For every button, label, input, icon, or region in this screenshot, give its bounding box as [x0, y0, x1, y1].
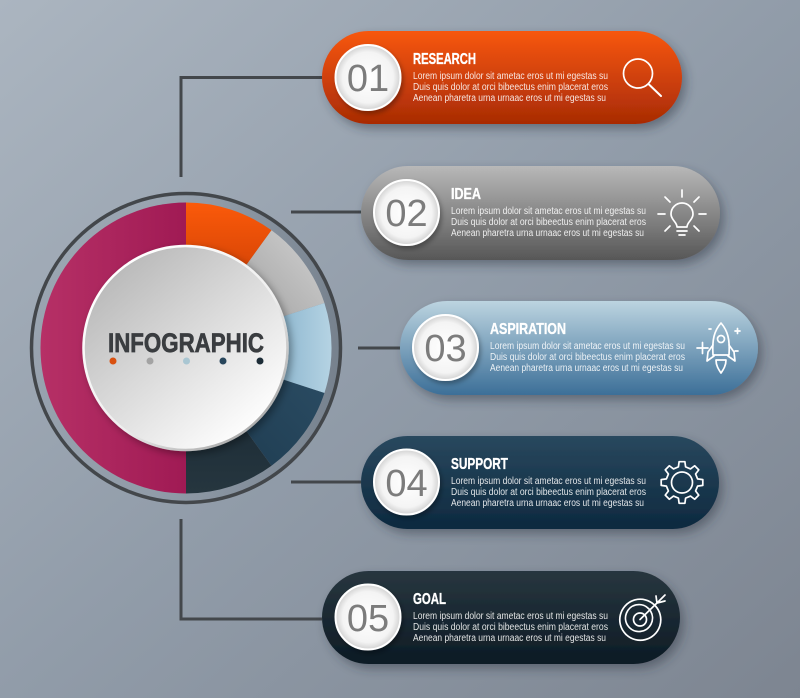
heading: GOAL — [413, 591, 446, 608]
segment: light blue — [281, 303, 332, 393]
body text — [451, 206, 646, 239]
donut chart — [32, 194, 340, 502]
icon: magnifier — [624, 59, 661, 96]
segment: orange — [186, 202, 272, 267]
segment: grey — [245, 230, 324, 317]
body text: Duis quis dolor at orci bibeectus enim placerat eros — [490, 352, 685, 363]
number badge 03: 03 — [424, 328, 467, 370]
icon: rocket — [697, 323, 740, 373]
number badge 01 — [336, 45, 400, 110]
heading: SUPPORT — [451, 456, 508, 473]
body text: Duis quis dolor at orci bibeectus enim placerat eros — [451, 487, 646, 498]
number badge 02 — [374, 180, 439, 245]
body text: Aenean pharetra urna urnaac eros ut mi egestas su — [490, 363, 683, 374]
body text: Duis quis dolor at orci bibeectus enim placerat eros — [413, 622, 608, 633]
number badge 01: 01 — [347, 58, 389, 100]
outer ring — [32, 194, 340, 502]
number badge 04 — [374, 450, 439, 514]
number badge 05 — [336, 584, 400, 650]
heading: ASPIRATION — [490, 321, 566, 338]
panel: 05 goal — [322, 571, 680, 664]
number badge 05: 05 — [347, 598, 389, 640]
panel: 04 support — [361, 436, 719, 529]
body text: Aenean pharetra urna urnaac eros ut mi egestas su — [413, 633, 606, 644]
body text: Lorem ipsum dolor sit ametac eros ut mi egestas su — [490, 341, 685, 352]
number badge 02: 02 — [385, 193, 428, 235]
panel: 01 research — [322, 31, 682, 124]
body text: Aenean pharetra urna urnaac eros ut mi egestas su — [451, 228, 644, 239]
heading: RESEARCH — [413, 51, 476, 68]
number badge 04: 04 — [385, 463, 428, 505]
heading: IDEA — [451, 186, 481, 203]
segment: crimson half — [41, 202, 186, 494]
body text: Lorem ipsum dolor sit ametac eros ut mi egestas su — [451, 476, 646, 487]
centre title: INFOGRAPHIC — [108, 328, 264, 358]
panel: 03 aspiration — [400, 301, 758, 395]
number badge 03 — [413, 315, 478, 380]
body text — [451, 476, 646, 509]
body text: Duis quis dolor at orci bibeectus enim placerat eros — [413, 82, 608, 93]
body text — [413, 71, 608, 104]
segment: steel navy — [245, 379, 324, 466]
icon: target — [620, 595, 665, 640]
body text: Duis quis dolor at orci bibeectus enim placerat eros — [451, 217, 646, 228]
colour dots — [110, 358, 264, 364]
panel: 02 idea — [361, 166, 720, 260]
body text — [490, 341, 685, 374]
icon: gear — [661, 462, 703, 503]
connector lines — [181, 78, 400, 619]
body text — [413, 611, 608, 644]
body text: Aenean pharetra urna urnaac eros ut mi egestas su — [413, 93, 606, 104]
body text: Lorem ipsum dolor sit ametac eros ut mi egestas su — [413, 71, 608, 82]
segment: dark slate — [186, 429, 272, 494]
centre disc — [84, 246, 288, 450]
body text: Lorem ipsum dolor sit ametac eros ut mi egestas su — [413, 611, 608, 622]
body text: Aenean pharetra urna urnaac eros ut mi egestas su — [451, 498, 644, 509]
icon: light bulb — [658, 190, 706, 235]
body text: Lorem ipsum dolor sit ametac eros ut mi egestas su — [451, 206, 646, 217]
